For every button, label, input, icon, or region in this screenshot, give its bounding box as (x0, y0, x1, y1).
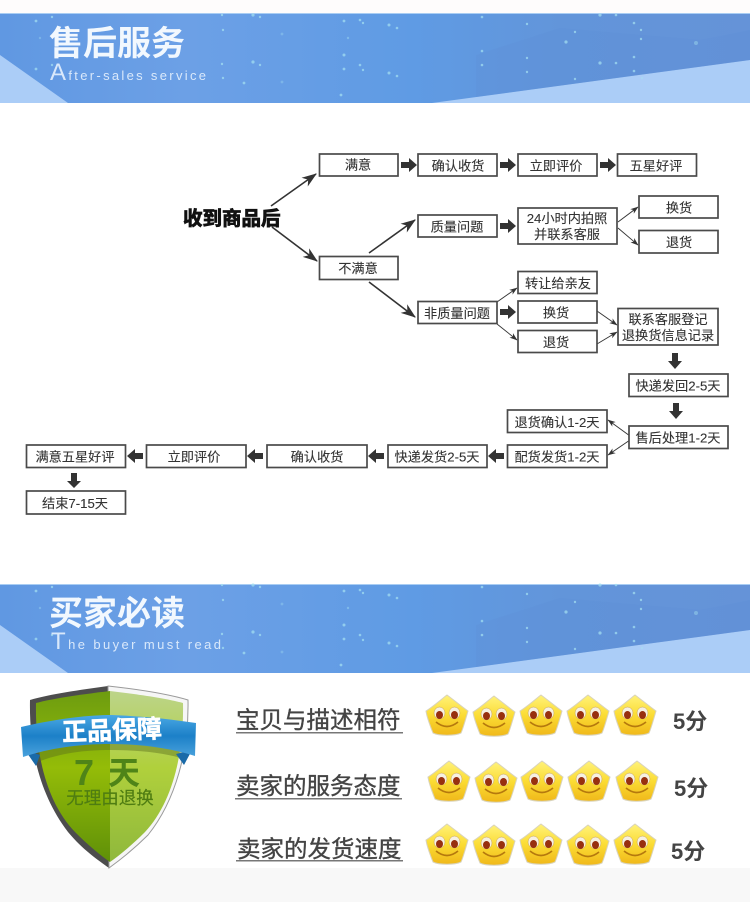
box: 五星好评: 五星好评 (630, 158, 682, 174)
rating label: 宝贝与描述相符 (236, 707, 400, 733)
box: 售后处理 (629, 426, 728, 448)
box: 快递发回 (629, 374, 728, 396)
block arrows (67, 158, 683, 488)
box: 非质量问题: 非质量问题 (424, 306, 490, 321)
seven days: 7 (74, 752, 94, 793)
stars (426, 695, 656, 736)
box: 非质量问题 (418, 302, 497, 324)
box: 快递发货: 快递发货2-5天 (394, 448, 480, 464)
box: 确认收货 (418, 154, 497, 176)
ribbon text: 正品保障 (62, 715, 163, 747)
box: 满意五星好评 (26, 445, 126, 468)
page background top strip (0, 0, 750, 13)
seven days: 天 (108, 755, 140, 791)
box: 配货发货: 配货发货1-2天 (514, 448, 600, 464)
box: 退货 (518, 330, 597, 352)
start label: 收到商品后 (183, 208, 281, 230)
box: 立即评价 (518, 154, 597, 176)
shield badge (21, 686, 196, 868)
ribbon shadow (36, 741, 182, 762)
banner subtitle: The buyer must read (51, 628, 221, 655)
banner heading: 售后服务 (49, 25, 185, 63)
box: 退货: 退货 (543, 334, 569, 350)
box: 24小时内拍照并联系客服 (518, 208, 617, 244)
score: 5分 (673, 709, 707, 734)
banner heading: 买家必读 (49, 595, 185, 633)
box: 24小时内拍照并联系客服: 并联系客服 (534, 226, 600, 242)
box: 满意: 满意 (345, 156, 371, 172)
branch arrows (271, 174, 638, 455)
rating label: 卖家的服务态度 (236, 773, 400, 799)
rating row 1 (236, 695, 707, 736)
box: 联系客服登记: 联系客服登记 (628, 311, 708, 327)
box: 不满意: 不满意 (338, 260, 378, 276)
box: 换货 (639, 196, 718, 218)
banner subtitle: After-sales service (50, 59, 206, 86)
ribbon (21, 715, 196, 766)
box: 确认收货 (267, 445, 367, 468)
box: 确认收货: 确认收货 (432, 158, 484, 174)
box: 质量问题 (418, 215, 497, 237)
box: 质量问题: 质量问题 (431, 220, 483, 234)
seven days (74, 752, 140, 793)
bottom strip (0, 868, 750, 902)
stars (428, 761, 658, 802)
box: 快递发回: 快递发回2-5天 (636, 378, 720, 394)
score: 5分 (671, 839, 705, 864)
banner: after-sales service (0, 13, 750, 103)
box: 结束 (26, 491, 126, 514)
box: 快递发货 (388, 445, 487, 468)
box: 退货确认 (508, 410, 607, 432)
score: 5分 (674, 776, 708, 801)
box: 不满意 (320, 256, 398, 280)
box: 立即评价: 立即评价 (530, 158, 582, 174)
box: 转让给亲友 (518, 272, 597, 294)
box: 五星好评 (618, 154, 696, 176)
banner: buyer must read (0, 583, 750, 673)
box: 退货 (639, 230, 718, 253)
box: 联系客服登记 (618, 308, 718, 345)
rating row 2 (235, 761, 708, 802)
box: 售后处理: 售后处理1-2天 (636, 430, 720, 446)
box: 配货发货 (508, 445, 607, 468)
box: 联系客服登记: 退换货信息记录 (622, 327, 714, 343)
box: 满意 (320, 154, 398, 176)
box: 退货确认: 退货确认1-2天 (514, 414, 600, 430)
flowchart (26, 154, 728, 514)
rating row 3 (236, 824, 705, 865)
box: 退货: 退货 (666, 234, 692, 250)
box: 结束: 结束7-15天 (42, 496, 108, 511)
box: 立即评价 (146, 445, 246, 468)
no reason return: 无理由退换 (66, 788, 154, 808)
box: 满意五星好评: 满意五星好评 (35, 448, 115, 464)
box: 24小时内拍照并联系客服: 24小时内拍照 (527, 211, 607, 226)
box: 确认收货: 确认收货 (291, 448, 343, 464)
box: 换货: 换货 (543, 304, 569, 320)
box: 换货 (518, 301, 597, 323)
rating label: 卖家的发货速度 (237, 836, 402, 862)
box: 换货: 换货 (666, 200, 692, 216)
box: 转让给亲友: 转让给亲友 (525, 276, 591, 291)
stars (426, 824, 656, 865)
box: 立即评价: 立即评价 (168, 450, 220, 464)
